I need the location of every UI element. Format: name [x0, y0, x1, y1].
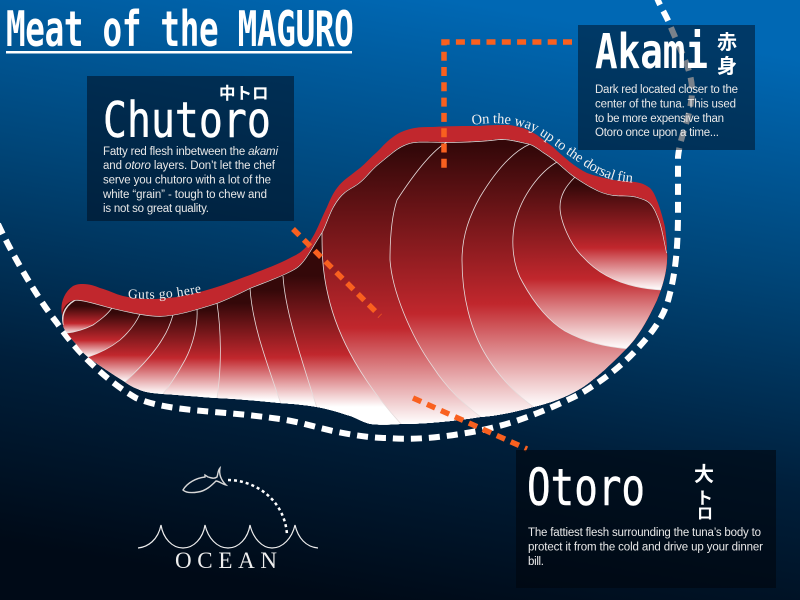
ocean label: OCEAN — [175, 548, 277, 573]
orange pointer: akami — [444, 42, 572, 170]
otoro kana — [694, 463, 714, 523]
chutoro description: serve you chutoro with a lot of the — [103, 174, 271, 186]
panel: chutoro — [87, 76, 294, 221]
otoro description: protect it from the cold and drive up your dinner — [528, 542, 763, 554]
icon: ocean waves — [138, 525, 318, 548]
chutoro description: white “grain” - tough to chew and — [102, 189, 267, 201]
chutoro heading: Chutoro — [103, 92, 271, 149]
otoro description: The fattiest flesh surrounding the tuna’s body to — [528, 527, 761, 539]
panel: akami — [578, 25, 755, 150]
akami kanji: 身 — [717, 55, 737, 78]
dotted jump arc — [228, 480, 287, 535]
chutoro description — [102, 146, 278, 215]
otoro kana: ロ — [697, 506, 713, 523]
label: guts go here — [128, 286, 201, 302]
tuna cross-section — [61, 125, 668, 425]
chutoro kana: 中トロ — [219, 84, 268, 103]
akami heading: Akami — [595, 25, 708, 80]
orange pointer: otoro — [413, 398, 527, 449]
orange pointer: chutoro — [293, 229, 380, 316]
akami description: Dark red located closer to the — [595, 84, 738, 96]
akami description: Otoro once upon a time... — [595, 127, 719, 139]
akami kanji: 赤 — [717, 31, 737, 54]
chutoro description: is not so great quality. — [103, 203, 209, 215]
akami description: center of the tuna. This used — [595, 98, 736, 110]
otoro heading: Otoro — [527, 458, 645, 517]
otoro kana: ト — [696, 489, 713, 508]
panel: otoro — [516, 450, 776, 588]
dashed cut line around the tuna body — [0, 0, 692, 439]
otoro description — [528, 527, 763, 568]
akami description: to be more expensive than — [595, 113, 724, 125]
otoro kana: 大 — [694, 463, 714, 486]
meat layers — [62, 139, 668, 425]
akami description — [595, 84, 738, 139]
title: Meat of the MAGURO — [6, 0, 354, 58]
otoro description: bill. — [528, 556, 544, 568]
chutoro description: and otoro layers. Don’t let the chef — [103, 160, 276, 172]
label: guts go here: Guts go here — [128, 286, 201, 302]
icon: jumping fish — [183, 468, 226, 493]
chutoro description: Fatty red flesh inbetween the akami — [103, 146, 278, 158]
red skin rim — [61, 125, 667, 340]
label: on the way up to the dorsal fin: On the way up to the dorsal fin — [472, 113, 632, 183]
akami kanji — [717, 31, 737, 78]
